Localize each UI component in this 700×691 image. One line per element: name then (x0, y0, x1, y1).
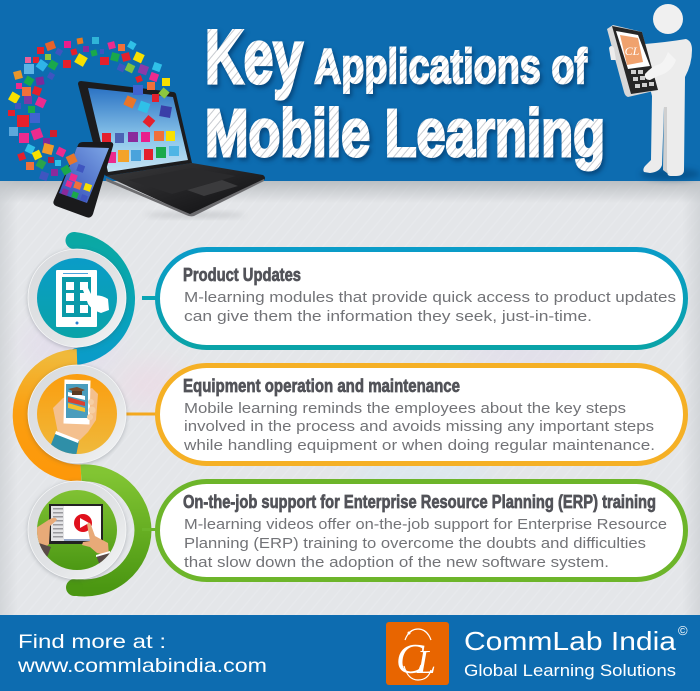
panel: ERP: M-learning videos offer on-the-job support for Enterprise Resource (184, 517, 667, 533)
panel: equipment: Mobile learning reminds the employees about the key steps (184, 401, 626, 417)
ring arc 2 (21, 358, 81, 473)
title: Applications of (314, 40, 588, 94)
ring arc 3 end cap (66, 579, 83, 596)
illustration: 3D figure holding phone (607, 4, 700, 180)
panel: product updates (158, 250, 686, 348)
panel: equipment: Equipment operation and maintenance (183, 376, 460, 396)
illustration: smartphone (53, 142, 113, 218)
CommLab logo badge: C (396, 637, 425, 683)
icon: tablet with pointing hand (28, 249, 126, 347)
CommLab wordmark: © (678, 623, 688, 638)
step 2: equipment (21, 358, 685, 473)
panel: ERP: Planning (ERP) training to overcome the doubts and difficulties (184, 536, 646, 552)
panel: product updates: Product Updates (183, 265, 301, 285)
CommLab wordmark (464, 623, 688, 680)
footer band (0, 615, 700, 691)
CommLab wordmark: CommLab India (464, 626, 677, 656)
ring arc 3 (74, 473, 143, 588)
illustration: laptop (78, 81, 265, 218)
panel: ERP (158, 482, 686, 580)
illustration: app icons on laptop screen (102, 131, 179, 163)
CommLab logo badge (386, 622, 449, 685)
illustration: 3D figure holding phone: CL (625, 44, 640, 58)
page background (0, 181, 700, 615)
header band (0, 0, 700, 181)
panel: equipment: involved in the process and avoids missing any important steps (184, 419, 654, 435)
panel: equipment (158, 366, 686, 464)
footer link text (17, 631, 267, 677)
footer link text: www.commlabindia.com (17, 655, 267, 677)
panel: equipment: while handling equipment or when doing regular maintenance. (183, 438, 655, 454)
title: Key (205, 15, 303, 100)
CommLab wordmark: Global Learning Solutions (464, 662, 676, 680)
CommLab logo badge: L (416, 644, 436, 681)
step 1: product updates (74, 240, 686, 356)
connector 2 (120, 412, 158, 416)
illustration: swirl of app icons (8, 37, 172, 181)
connector 1 (142, 296, 158, 300)
step 3: ERP (66, 473, 686, 596)
panel: ERP: that slow down the adoption of the new software system. (184, 555, 609, 571)
connector 3 (142, 528, 158, 531)
panel: product updates: M-learning modules that provide quick access to product updates (184, 290, 676, 306)
icon: tablet with video play button (28, 481, 126, 579)
panel: product updates: can give them the information they seek, just-in-time. (184, 309, 592, 325)
footer link text: Find more at : (18, 631, 166, 653)
ring arc 1 (74, 240, 127, 356)
title (205, 15, 605, 171)
icon: hand holding phone with books (28, 365, 126, 463)
